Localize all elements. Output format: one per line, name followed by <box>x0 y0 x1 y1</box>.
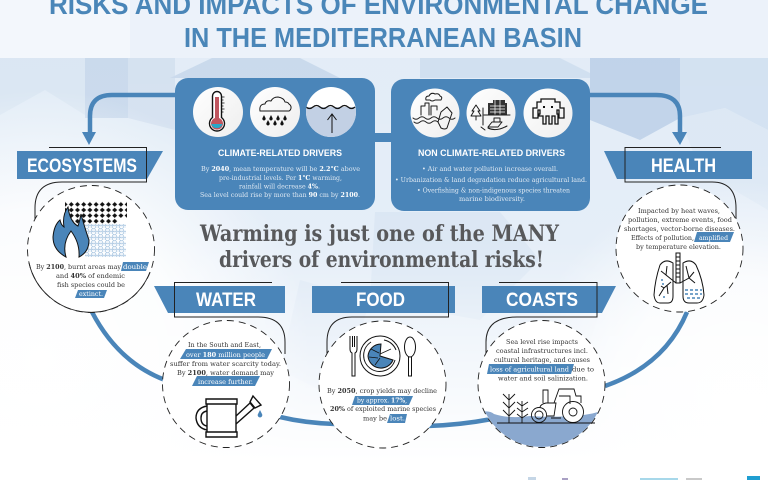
text: food facts <box>327 388 437 423</box>
banner: water: WATER <box>196 290 256 311</box>
text: non-climate drivers facts: • Urbanization & land degradation reduce agricultural land. <box>395 177 587 184</box>
text: coasts facts: water and soil salinization. <box>498 376 588 382</box>
text: coasts facts: cultural heritage, and causes <box>494 357 590 364</box>
text: climate drivers facts: Sea level could rise by more than 90 cm by 2100. <box>200 192 360 199</box>
panel: health <box>604 148 752 312</box>
text: food facts: 20% of exploited marine species <box>330 406 436 413</box>
statement: warming is one of many drivers: drivers of environmental risks! <box>219 247 544 273</box>
icon: invasive species invader <box>524 88 572 138</box>
text: ecosystems facts: By 2100, burnt areas may <box>36 264 122 271</box>
text: water facts: suffer from water scarcity today. <box>170 361 281 368</box>
statement: warming is one of many drivers: Warming is just one of the MANY <box>199 221 560 247</box>
text: ecosystems facts: fish species could be <box>57 282 125 289</box>
text: coasts facts: loss of agricultural land <box>490 366 569 374</box>
text: water facts: By 2100 , water demand may <box>177 370 275 377</box>
title <box>49 0 708 53</box>
icon: rain cloud <box>250 87 300 137</box>
arrow: climate drivers to ecosystems <box>82 95 176 145</box>
text: climate drivers facts: rainfall will decrease 4%. <box>239 184 320 190</box>
text: health facts: by temperature elevation. <box>636 244 721 251</box>
icon: flooded water <box>484 411 598 447</box>
icon: polluted city <box>410 88 460 138</box>
text: health facts: shortages, vector-borne diseases. <box>624 226 735 233</box>
banner: water <box>154 282 285 354</box>
text: climate drivers facts: pre-industrial levels. Per 1°C warming, <box>219 175 342 182</box>
circle: food <box>319 321 446 448</box>
circle: coasts <box>478 320 605 448</box>
panel: climate-related drivers <box>175 78 375 210</box>
text: water facts <box>170 342 281 386</box>
icon: urbanization and land degradation <box>466 88 516 138</box>
connector between driver panels <box>374 133 392 142</box>
text: coasts facts: coastal infrastructures incl. <box>496 348 588 355</box>
icon: plants and tractor <box>497 389 595 423</box>
text: ecosystems facts: and 40% of endemic <box>56 273 126 280</box>
icon: fish species pattern <box>65 201 127 257</box>
icon: plate with fork and spoon <box>350 336 416 376</box>
text: ecosystems facts <box>36 262 149 298</box>
text: health facts: pollution, extreme events, food <box>628 217 732 224</box>
statement: warming is one of many drivers <box>199 221 560 273</box>
footer logos (cropped) <box>528 476 760 480</box>
text: climate drivers facts <box>200 166 360 199</box>
banner: ecosystems <box>17 148 163 219</box>
banner: ecosystems: ECOSYSTEMS <box>27 156 137 177</box>
connecting curve between impact circles <box>92 312 687 426</box>
banner: food <box>312 282 455 354</box>
text: coasts facts: due to <box>572 366 594 374</box>
banner: coasts: COASTS <box>506 290 578 311</box>
circle: ecosystems <box>28 186 154 312</box>
text: food facts: lost. <box>390 416 405 422</box>
icon: rising sea level <box>306 87 356 140</box>
text: food facts: by approx. 17%, <box>357 398 407 404</box>
text: food facts: By 2050, crop yields may decline <box>327 388 437 395</box>
banner: health: HEALTH <box>651 156 716 177</box>
text: coasts facts <box>487 339 594 382</box>
arrow: non-climate drivers to health <box>589 95 687 145</box>
circle: health <box>616 185 743 312</box>
text: ecosystems facts: double <box>123 264 148 271</box>
text: health facts: Effects of pollution, <box>631 235 694 242</box>
panel: coasts <box>478 282 616 450</box>
text: health facts: amplified <box>699 235 728 242</box>
panel: food <box>312 282 455 448</box>
text: non-climate drivers facts <box>395 166 587 203</box>
icon: thermometer <box>193 87 243 137</box>
banner: coasts <box>482 282 616 354</box>
text: coasts facts: Sea level rise impacts <box>506 339 578 346</box>
text: non-climate drivers facts: marine biodiversity. <box>459 196 525 203</box>
text: climate drivers facts: By 2040, mean temperature will be 2.2°C above <box>201 166 360 173</box>
text: water facts: over 180 million people <box>186 352 265 359</box>
panel: non climate-related drivers <box>391 79 590 211</box>
text: water facts: In the South and East, <box>188 342 261 349</box>
icon: flame <box>53 207 89 257</box>
panel: water <box>154 282 290 448</box>
icon: watering can <box>196 396 262 437</box>
heading: climate-related drivers: CLIMATE-RELATED DRIVERS <box>218 148 342 158</box>
text: health facts <box>624 208 735 251</box>
panel: ecosystems <box>17 148 163 312</box>
circle: water <box>162 320 290 448</box>
text: health facts: Impacted by heat waves, <box>638 208 720 215</box>
text: water facts: increase further. <box>198 379 253 386</box>
text: non-climate drivers facts: • Air and water pollution increase overall. <box>422 166 558 173</box>
heading: non climate-related drivers: NON CLIMATE-RELATED DRIVERS <box>418 148 565 158</box>
banner: food: FOOD <box>356 290 405 311</box>
text: ecosystems facts: extinct. <box>79 291 103 298</box>
icon: lungs <box>654 253 704 303</box>
title: IN THE MEDITERRANEAN BASIN <box>184 22 582 53</box>
text: non-climate drivers facts: • Overfishing & non-indigenous species threaten <box>417 188 570 194</box>
text: food facts: may be <box>363 416 387 422</box>
banner: health <box>604 148 752 219</box>
